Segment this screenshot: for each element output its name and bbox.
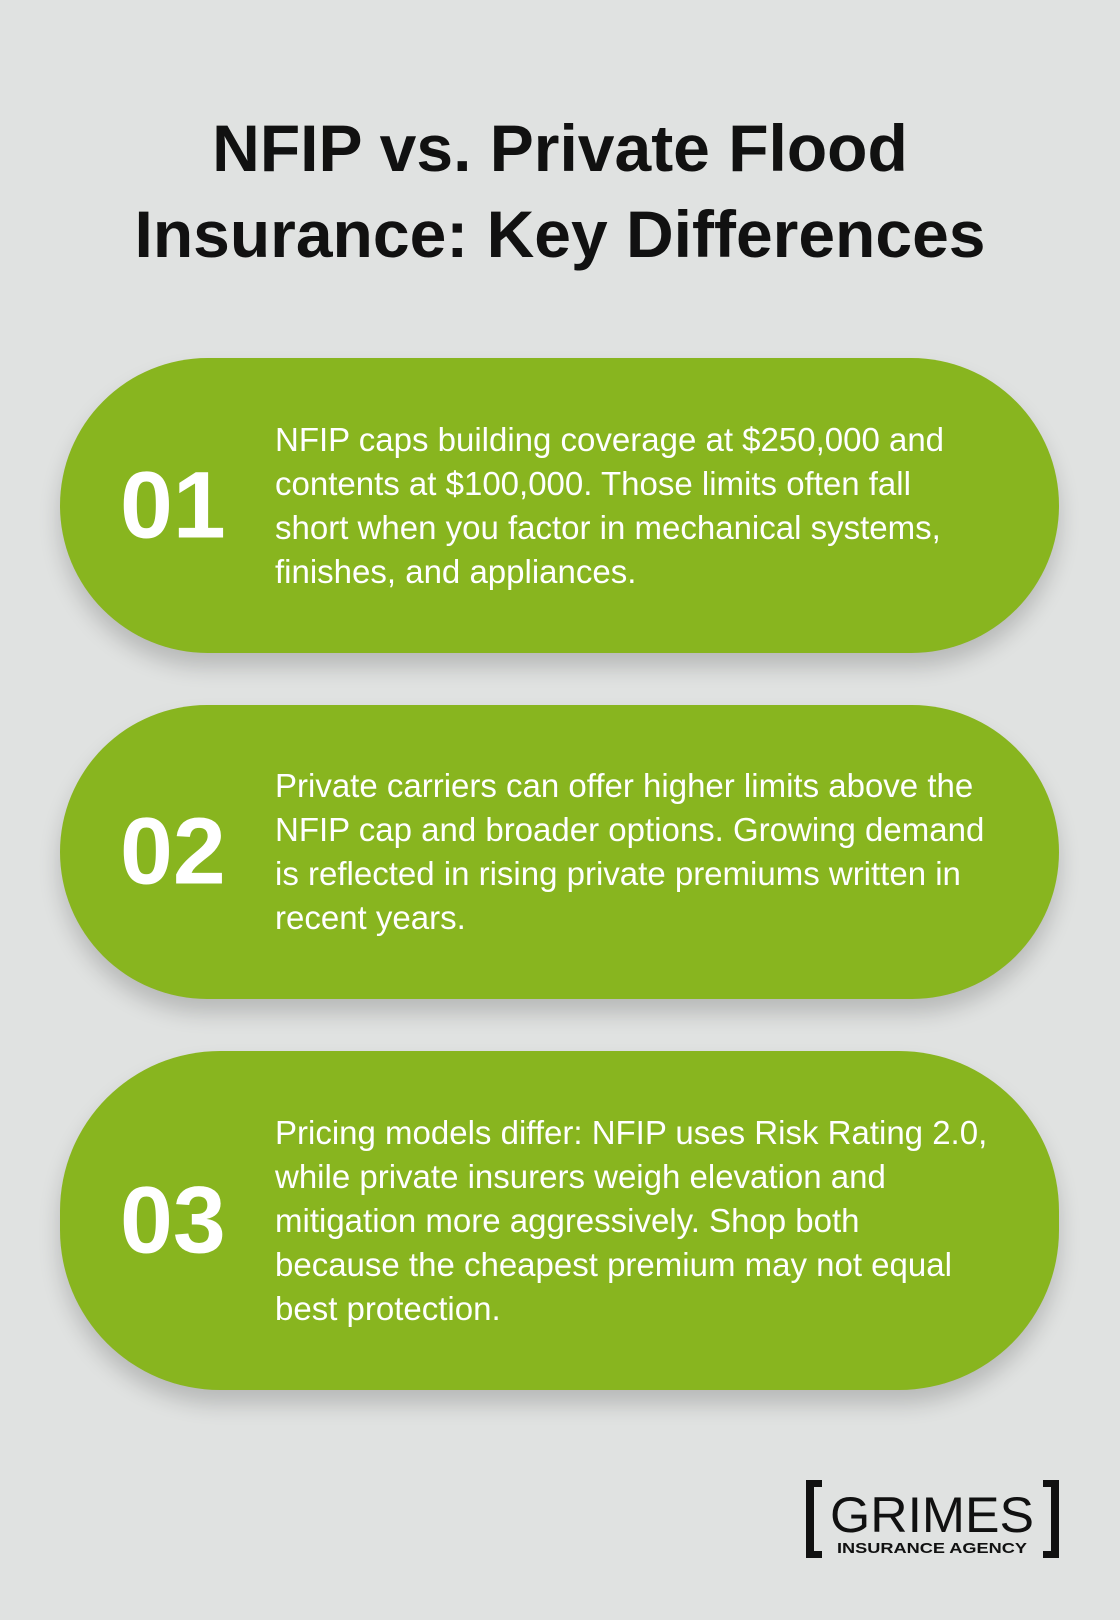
text 01: NFIP caps building coverage at $250,000 and xyxy=(275,420,944,458)
logo xyxy=(806,1480,1059,1558)
text 02 xyxy=(275,767,984,936)
text 02: is reflected in rising private premiums written in xyxy=(275,855,961,892)
text 01: finishes, and appliances. xyxy=(275,552,636,590)
text 03: best protection. xyxy=(275,1290,501,1326)
text 02: NFIP cap and broader options. Growing demand xyxy=(275,811,984,848)
text 02: Private carriers can offer higher limits above the xyxy=(275,767,973,804)
logo: INSURANCE AGENCY xyxy=(837,1540,1027,1557)
text 01 xyxy=(275,420,944,590)
panel: 02 xyxy=(60,705,1059,999)
number 01: 01 xyxy=(120,452,226,558)
title: Insurance: Key Differences xyxy=(134,197,986,271)
number 02: 02 xyxy=(120,798,226,904)
panel: 01 xyxy=(60,358,1059,653)
text 03: Pricing models differ: NFIP uses Risk Rating 2.0, xyxy=(275,1114,987,1150)
text 03 xyxy=(275,1114,987,1327)
text 01: short when you factor in mechanical systems, xyxy=(275,508,941,546)
panel: 03 xyxy=(60,1051,1059,1390)
text 03: while private insurers weigh elevation and xyxy=(275,1158,886,1194)
title: NFIP vs. Private Flood xyxy=(212,111,908,185)
number 03: 03 xyxy=(120,1167,226,1273)
text 01: contents at $100,000. Those limits often fall xyxy=(275,464,911,502)
text 03: because the cheapest premium may not equal xyxy=(275,1246,952,1282)
title xyxy=(134,111,986,271)
logo: GRIMES xyxy=(830,1487,1034,1543)
text 03: mitigation more aggressively. Shop both xyxy=(275,1202,860,1238)
text 02: recent years. xyxy=(275,899,466,936)
